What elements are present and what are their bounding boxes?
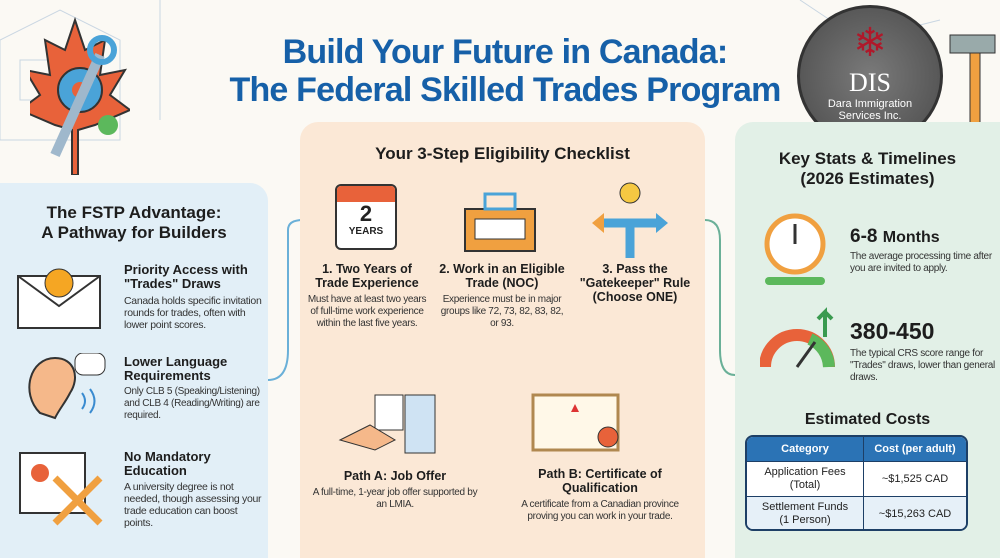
logo: DIS: Dara Immigration bbox=[828, 98, 912, 110]
panel: middle checklist bbox=[300, 122, 705, 558]
table: costs: (1 Person) bbox=[779, 514, 831, 526]
panel: right key stats bbox=[735, 122, 1000, 558]
heading: Your 3-Step Eligibility Checklist bbox=[375, 144, 630, 163]
table: costs: Category bbox=[781, 443, 829, 455]
icon: gauge bbox=[760, 307, 835, 368]
table: costs: ~$15,263 CAD bbox=[879, 508, 951, 520]
icon: certificate bbox=[532, 394, 620, 452]
heading: Key Stats & Timelines bbox=[779, 149, 956, 168]
logo: DIS: Services Inc. bbox=[839, 110, 901, 122]
path A bbox=[312, 469, 478, 510]
step 2: Experience must be in major groups like 72, 73, 82, 83, 82, or 93. bbox=[441, 294, 563, 329]
item 1: Canada holds specific invitation rounds for trades, often with lower point scores. bbox=[124, 295, 262, 331]
table: costs: Cost (per adult) bbox=[874, 443, 956, 455]
panel: left FSTP advantage bbox=[0, 183, 268, 558]
item 1 bbox=[124, 262, 262, 331]
icon: handshake building bbox=[338, 394, 436, 454]
path A: Path A: Job Offer bbox=[344, 469, 446, 483]
table: costs: ~$1,525 CAD bbox=[882, 473, 948, 485]
stat 2: The typical CRS score range for "Trades" draws, lower than general draws. bbox=[850, 348, 995, 383]
title: Build Your Future in Canada: bbox=[283, 33, 727, 71]
item 2: Only CLB 5 (Speaking/Listening) and CLB 4 (Reading/Writing) are required. bbox=[124, 386, 260, 421]
table: costs: Application Fees bbox=[764, 466, 846, 478]
icon: certificate with tools bbox=[19, 452, 102, 526]
table: costs bbox=[745, 435, 968, 531]
heading: (2026 Estimates) bbox=[800, 169, 935, 188]
item 1: Priority Access with "Trades" Draws bbox=[124, 262, 248, 291]
icon: calendar: YEARS bbox=[349, 226, 383, 237]
item 2: Lower Language Requirements bbox=[124, 354, 227, 383]
path A: A full-time, 1-year job offer supported by an LMIA. bbox=[313, 487, 477, 510]
icon: calendar bbox=[335, 184, 397, 250]
step 2: 2. Work in an Eligible Trade (NOC) bbox=[439, 262, 565, 290]
step 1: Must have at least two years of full-time work experience within the last five years. bbox=[308, 294, 426, 329]
icon: hammer right bbox=[950, 34, 996, 122]
item 3: No Mandatory Education bbox=[124, 449, 211, 478]
item 3 bbox=[124, 449, 262, 529]
icon: toolbox bbox=[464, 192, 536, 252]
stat 2 bbox=[850, 318, 995, 383]
item 2 bbox=[124, 354, 260, 421]
heading bbox=[779, 149, 956, 188]
heading bbox=[41, 203, 227, 242]
path B: Path B: Certificate of Qualification bbox=[538, 467, 662, 495]
icon: stopwatch bbox=[764, 214, 826, 285]
icon: crossroad arrows bbox=[592, 182, 668, 258]
logo: DIS: DIS bbox=[849, 68, 891, 97]
icon: ear bbox=[28, 353, 106, 420]
stat 2: 380-450 bbox=[850, 318, 934, 344]
step 1 bbox=[308, 262, 426, 329]
path B bbox=[521, 467, 679, 522]
heading: The FSTP Advantage: bbox=[47, 203, 221, 222]
stat 1 bbox=[850, 226, 992, 274]
logo: DIS bbox=[797, 5, 943, 147]
table: costs: (Total) bbox=[790, 479, 820, 491]
item 3: A university degree is not needed, though assessing your trade education can boost points. bbox=[124, 481, 261, 529]
connector arrows bbox=[268, 219, 300, 381]
table: costs: Settlement Funds bbox=[762, 501, 848, 513]
step 3: 3. Pass the "Gatekeeper" Rule (Choose ONE) bbox=[580, 262, 690, 304]
icon: maple leaf with tools bbox=[30, 17, 130, 175]
path B: A certificate from a Canadian province proving you can work in your trade. bbox=[521, 499, 679, 522]
logo: DIS: ❄ bbox=[853, 21, 887, 65]
heading: estimated costs: Estimated Costs bbox=[805, 411, 930, 428]
heading: A Pathway for Builders bbox=[41, 223, 227, 242]
step 2 bbox=[439, 262, 565, 329]
icon: calendar: 2 bbox=[360, 201, 372, 226]
stat 1: The average processing time after you are invited to apply. bbox=[850, 251, 992, 274]
title bbox=[229, 33, 781, 109]
step 1: 1. Two Years of Trade Experience bbox=[315, 262, 419, 290]
stat 1: 6-8 Months bbox=[850, 226, 940, 247]
title: The Federal Skilled Trades Program bbox=[229, 71, 781, 109]
icon: envelope bbox=[17, 268, 101, 329]
